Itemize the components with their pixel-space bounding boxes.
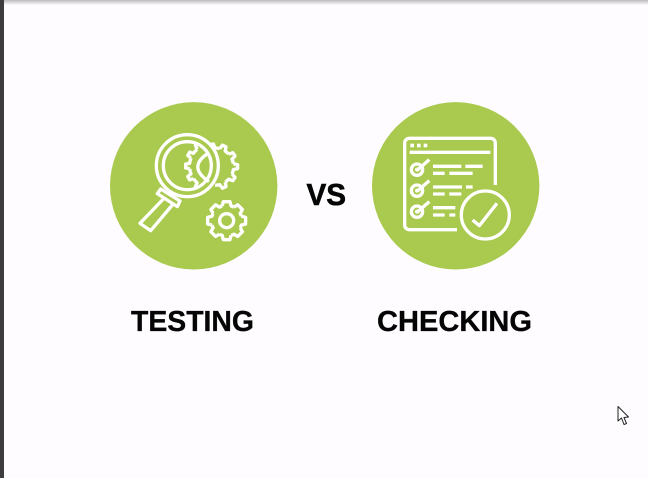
panel: checking — [372, 102, 539, 338]
testing green circle — [110, 102, 277, 270]
testing label: TESTING — [131, 306, 254, 338]
vs label: VS — [306, 177, 346, 212]
checking green circle — [372, 102, 539, 270]
icon: mouse cursor — [618, 406, 628, 424]
icon: magnifying glass with gears — [140, 135, 246, 240]
checking label: CHECKING — [377, 306, 532, 338]
panel: testing — [110, 102, 277, 338]
icon: checklist window with check badge — [405, 138, 509, 239]
